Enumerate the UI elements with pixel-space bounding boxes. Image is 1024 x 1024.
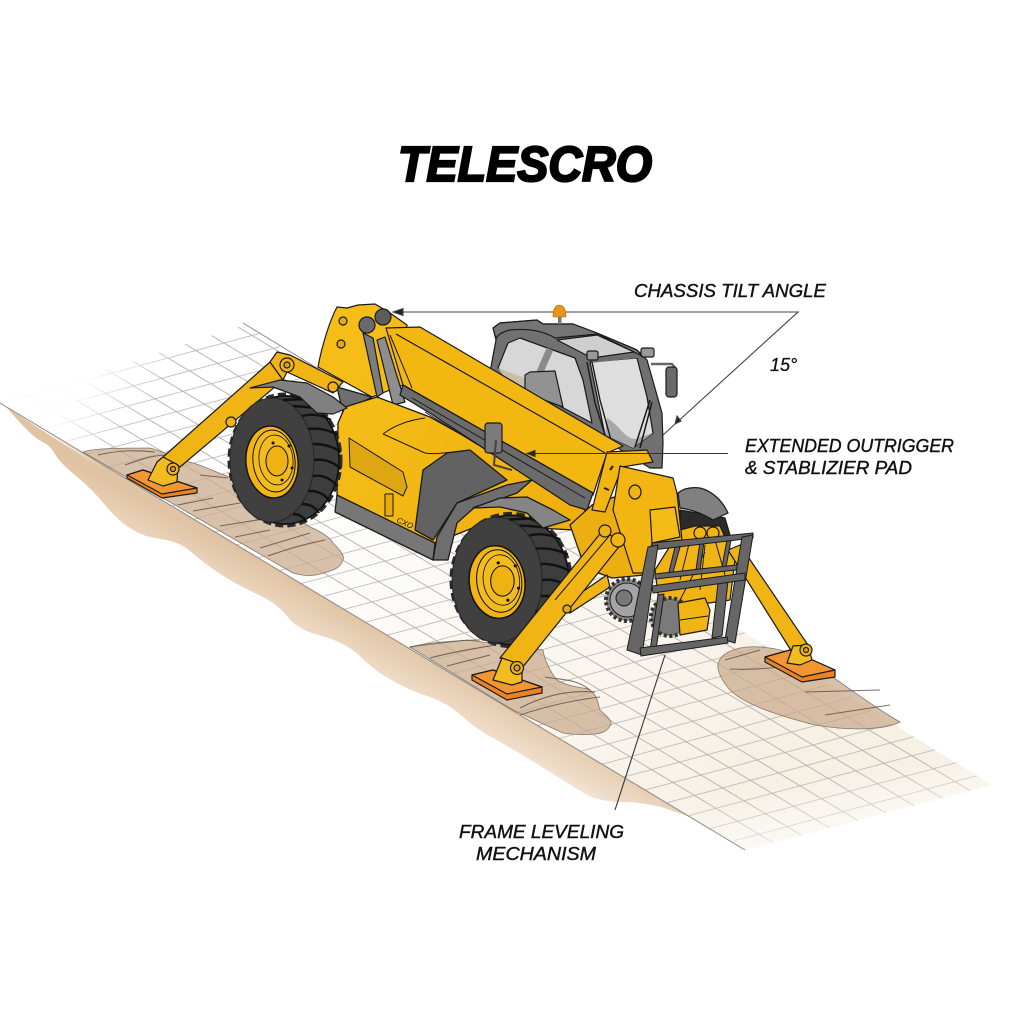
lower skirt	[335, 495, 435, 560]
beacon	[553, 305, 566, 324]
leveling cylinder	[678, 598, 710, 635]
b pillar	[540, 349, 550, 372]
second gear	[651, 598, 689, 636]
ground: sloped grid terrain	[0, 323, 992, 850]
label: chassis tilt angle: CHASSIS TILT ANGLE	[634, 281, 827, 301]
grey side panel	[415, 450, 507, 540]
sand embankment edge	[0, 403, 693, 818]
roof	[493, 320, 642, 356]
front wheel	[452, 514, 571, 646]
cab	[490, 305, 677, 468]
label: frame leveling mechanism	[459, 822, 624, 864]
pivot tower	[318, 304, 407, 397]
label: extended outrigger: EXTENDED OUTRIGGER	[745, 436, 954, 456]
rear wheel	[230, 395, 341, 525]
label: extended outrigger: & STABLIZIER PAD	[745, 458, 912, 478]
disturbed soil patch: front	[410, 640, 611, 735]
boom outer section	[386, 327, 623, 495]
latch plate	[385, 494, 393, 516]
wiper	[635, 400, 652, 448]
cross bar	[592, 356, 640, 361]
brace	[563, 575, 610, 613]
front tower casting	[570, 450, 682, 578]
callout leader: frame leveling	[615, 655, 665, 810]
seat	[525, 371, 563, 407]
work lamp left	[587, 351, 598, 360]
yellow mast	[655, 526, 735, 610]
label: extended outrigger	[745, 436, 954, 478]
grid surface	[0, 325, 992, 850]
work lamp right	[641, 348, 654, 357]
model badge: CXO	[395, 516, 415, 531]
right arm	[728, 545, 808, 652]
windshield	[590, 358, 653, 448]
engine cover	[337, 397, 593, 543]
disturbed soil patch: rear	[83, 448, 343, 576]
casting	[613, 466, 682, 573]
callout leader: chassis tilt angle	[393, 308, 798, 435]
stabilizer pad	[127, 470, 197, 498]
boom head	[592, 450, 653, 512]
back fender	[678, 488, 728, 520]
dark wheel behind	[680, 510, 730, 560]
hydraulic cylinders	[363, 333, 383, 397]
yellow backing frame	[570, 495, 645, 578]
arm	[500, 530, 622, 668]
side window	[498, 338, 592, 423]
arm	[163, 362, 283, 467]
title: TELESCRO	[398, 138, 652, 192]
main gear	[606, 579, 648, 621]
side mirror	[651, 364, 677, 397]
rear engine link	[337, 387, 372, 413]
boom assembly	[318, 304, 623, 495]
chassis body	[335, 385, 593, 560]
right pad	[765, 644, 835, 682]
callout leader: outrigger and pad	[527, 450, 728, 456]
cab frame	[490, 320, 663, 468]
back fender and mast behind carriage	[655, 488, 835, 682]
frame leveling mechanism	[606, 533, 753, 656]
rear outrigger	[127, 352, 343, 498]
roof hatch glass	[557, 335, 634, 358]
carriage frame	[627, 533, 753, 656]
front fenders	[433, 480, 570, 560]
pad front	[472, 670, 542, 700]
disturbed soil patch: right	[718, 647, 900, 729]
boom mirror bracket	[485, 423, 512, 470]
front outrigger	[472, 525, 625, 700]
hub	[242, 423, 302, 501]
label: frame leveling mechanism: MECHANISM	[476, 844, 596, 864]
door pillar	[587, 362, 611, 440]
label: tilt value: 15°	[770, 355, 797, 375]
rear window beige base	[498, 368, 525, 395]
boom slide rails	[400, 385, 593, 510]
vent panel	[349, 438, 407, 496]
hub	[465, 543, 529, 621]
label: frame leveling mechanism: FRAME LEVELING	[459, 822, 624, 842]
rear fender	[250, 380, 347, 414]
